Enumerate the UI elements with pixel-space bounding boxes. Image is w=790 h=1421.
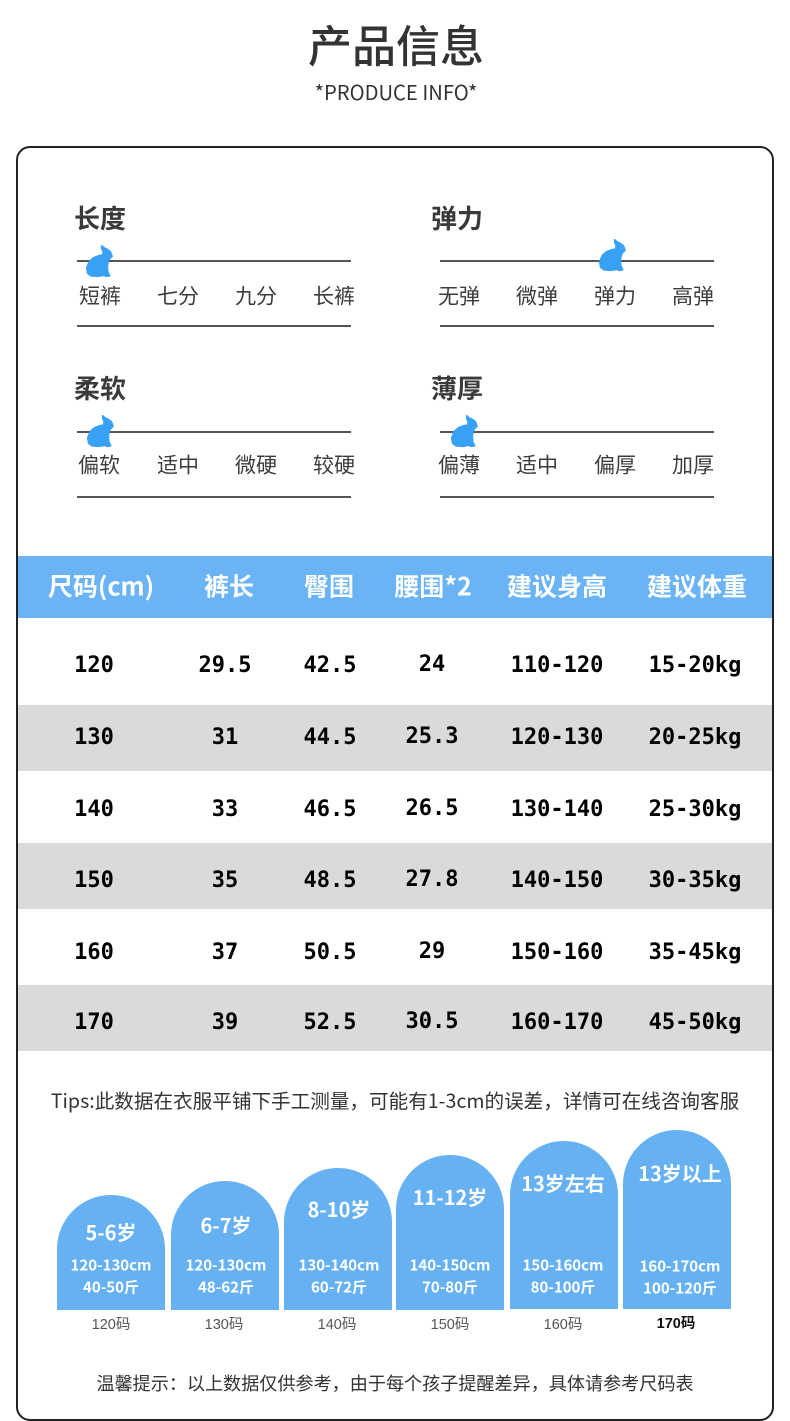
arch: 11-12 years (396, 1155, 504, 1310)
row 140 (74, 796, 741, 822)
arch: 5-6 years: 5-6岁 (86, 1217, 136, 1246)
options: elasticity: 无弹 (438, 280, 480, 310)
heading: length: 长度 (74, 199, 126, 236)
options: elasticity: 高弹 (672, 280, 714, 310)
row 140: 130-140 (511, 797, 603, 822)
table header: 腰围*2 (394, 568, 472, 604)
options: thickness (438, 450, 714, 480)
row 130: 25.3 (406, 724, 458, 749)
row 150: 48.5 (304, 868, 356, 893)
options: thickness: 偏厚 (594, 450, 636, 480)
arch: 6-7 years: 120-130cm (185, 1254, 267, 1276)
scale: softness (74, 369, 355, 498)
row 130 (18, 705, 772, 771)
arch: over 13 years (623, 1130, 731, 1309)
row 130: 130 (74, 725, 114, 750)
tips text: Tips:此数据在衣服平铺下手工测量，可能有1-3cm的误差，详情可在线咨询客服 (51, 1085, 739, 1114)
table header: 建议体重 (647, 568, 747, 604)
row 170: 30.5 (406, 1009, 458, 1034)
row 170: 45-50kg (649, 1010, 741, 1035)
options: thickness: 偏薄 (438, 450, 480, 480)
options: softness (78, 450, 355, 480)
options: elasticity: 微弹 (516, 280, 558, 310)
options: length: 长裤 (313, 280, 355, 310)
arch: over 13 years: 100-120斤 (643, 1278, 717, 1298)
row 170: 52.5 (304, 1010, 356, 1035)
row 150: 30-35kg (649, 868, 741, 893)
row 130: 20-25kg (649, 725, 741, 750)
row 140: 46.5 (304, 797, 356, 822)
arch: around 13 years: 80-100斤 (531, 1276, 595, 1298)
options: softness: 偏软 (78, 450, 120, 480)
row 160: 50.5 (304, 940, 356, 965)
options: length (79, 280, 355, 310)
row 120: 24 (419, 652, 445, 677)
row 120: 42.5 (304, 653, 356, 678)
row 120: 29.5 (199, 653, 251, 678)
icon: rabbit marker (86, 414, 114, 448)
size labels: 120码 (92, 1317, 130, 1333)
row 170: 170 (74, 1010, 114, 1035)
title: 产品信息 (308, 11, 484, 75)
row 140: 140 (74, 797, 114, 822)
row 150 (18, 843, 772, 909)
row 170: 160-170 (511, 1010, 603, 1035)
icon: rabbit marker (86, 244, 113, 278)
table header: 裤长 (204, 568, 254, 604)
table header: 臀围 (304, 568, 354, 604)
row 170: 39 (212, 1010, 238, 1035)
options: softness: 适中 (157, 450, 199, 480)
icon: rabbit marker (450, 414, 478, 448)
heading: thickness: 薄厚 (431, 369, 483, 406)
row 120: 110-120 (511, 653, 603, 678)
arch: 8-10 years: 60-72斤 (311, 1276, 367, 1298)
row 170 (18, 985, 772, 1051)
scale: elasticity (431, 199, 714, 327)
options: length: 短裤 (79, 280, 121, 310)
scale: length (74, 199, 355, 327)
icon: rabbit marker (598, 238, 626, 272)
arch: over 13 years: 160-170cm (639, 1256, 721, 1276)
size labels: 150码 (431, 1317, 469, 1333)
subtitle: *PRODUCE INFO* (315, 77, 477, 106)
arch: 5-6 years: 40-50斤 (83, 1276, 139, 1298)
arch: 5-6 years (57, 1195, 165, 1310)
arch: 11-12 years: 11-12岁 (413, 1182, 487, 1211)
options: softness: 微硬 (235, 450, 277, 480)
arch: 8-10 years: 8-10岁 (308, 1194, 370, 1223)
footer note: 温馨提示：以上数据仅供参考，由于每个孩子提醒差异，具体请参考尺码表 (96, 1370, 694, 1396)
size labels (92, 1316, 695, 1333)
options: elasticity (438, 280, 714, 310)
row 160 (74, 939, 741, 965)
arch: 6-7 years: 48-62斤 (198, 1276, 254, 1298)
options: length: 九分 (235, 280, 277, 310)
row 120 (74, 652, 741, 678)
size table (18, 556, 772, 1051)
row 140: 33 (212, 797, 238, 822)
arch: around 13 years: 13岁左右 (521, 1168, 605, 1197)
row 150: 35 (212, 868, 238, 893)
arch: 8-10 years: 130-140cm (298, 1254, 380, 1276)
row 130: 120-130 (511, 725, 603, 750)
row 160: 29 (419, 939, 445, 964)
heading: elasticity: 弹力 (431, 199, 483, 236)
row 150: 140-150 (511, 868, 603, 893)
arch: 11-12 years: 140-150cm (409, 1254, 491, 1276)
row 160: 150-160 (511, 940, 603, 965)
table header: 建议身高 (507, 568, 607, 604)
row 140: 25-30kg (649, 797, 741, 822)
arch: 6-7 years (171, 1181, 279, 1310)
options: length: 七分 (157, 280, 199, 310)
arch: around 13 years: 150-160cm (522, 1254, 604, 1276)
row 120: 15-20kg (649, 653, 741, 678)
row 150: 150 (74, 868, 114, 893)
heading: softness: 柔软 (74, 369, 126, 406)
row 130: 31 (212, 725, 238, 750)
options: softness: 较硬 (313, 450, 355, 480)
arch: over 13 years: 13岁以上 (638, 1158, 722, 1187)
row 160: 160 (74, 940, 114, 965)
row 150: 27.8 (406, 867, 458, 892)
size labels: 130码 (205, 1317, 243, 1333)
size labels: 160码 (544, 1317, 582, 1333)
row 120: 120 (74, 653, 114, 678)
row 160: 37 (212, 940, 238, 965)
options: thickness: 加厚 (672, 450, 714, 480)
table header: 尺码(cm) (48, 568, 154, 604)
row 160: 35-45kg (649, 940, 741, 965)
table header (18, 556, 772, 618)
options: elasticity: 弹力 (594, 280, 636, 310)
options: thickness: 适中 (516, 450, 558, 480)
size labels: 140码 (318, 1317, 356, 1333)
arch: 11-12 years: 70-80斤 (422, 1276, 478, 1298)
arch: around 13 years (510, 1141, 618, 1309)
size labels: 170码 (657, 1316, 695, 1332)
arch: 6-7 years: 6-7岁 (200, 1210, 252, 1239)
arch: 5-6 years: 120-130cm (70, 1254, 152, 1276)
row 130: 44.5 (304, 725, 356, 750)
row 140: 26.5 (406, 796, 458, 821)
scale: thickness (431, 369, 714, 498)
arch: 8-10 years (284, 1168, 392, 1310)
